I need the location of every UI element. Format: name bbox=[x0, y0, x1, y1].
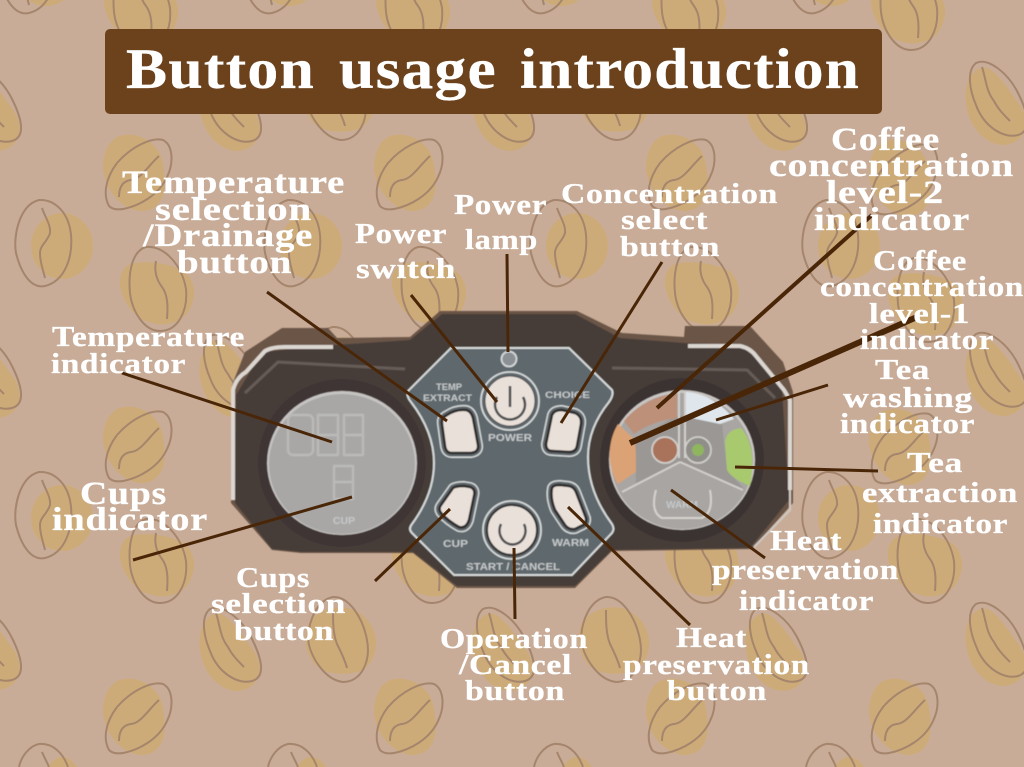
label: temperature selection button: Temperature bbox=[122, 165, 345, 201]
leader line: heat preservation button bbox=[568, 507, 690, 625]
leader line: level 1 bbox=[630, 317, 917, 443]
leader line: temperature selection bbox=[267, 292, 447, 421]
level 1 segment bbox=[610, 424, 636, 484]
seven segment digits bbox=[288, 415, 363, 499]
label: coffee concentration level 1 indicator bbox=[820, 246, 1024, 356]
label: cups indicator bbox=[52, 476, 208, 538]
label: tea extraction indicator: indicator bbox=[873, 509, 1008, 540]
device body outer edge bbox=[231, 311, 793, 588]
leader line: cups indicator bbox=[133, 497, 352, 560]
title banner: introduction bbox=[520, 38, 860, 101]
label: operation cancel button: button bbox=[465, 676, 565, 707]
label: temperature selection button: selection bbox=[155, 192, 312, 228]
label: power switch: Power bbox=[355, 219, 447, 250]
label: heat preservation button: button bbox=[667, 676, 767, 707]
label: concentration select button: Concentration bbox=[561, 179, 778, 210]
leader line: concentration select bbox=[561, 262, 662, 423]
panel button captions: CUP bbox=[443, 539, 468, 550]
title banner bbox=[105, 29, 882, 114]
label: heat preservation button: preservation bbox=[623, 650, 810, 681]
title banner: Button bbox=[126, 38, 315, 101]
leader line: heat preservation indicator bbox=[671, 490, 765, 558]
leader line: operation cancel bbox=[514, 548, 515, 619]
label: concentration select button: button bbox=[620, 232, 720, 263]
label: coffee concentration level 2 indicator bbox=[769, 122, 1014, 238]
panel button captions: CHOICE bbox=[545, 390, 590, 401]
dial dividers bbox=[622, 392, 743, 492]
label: heat preservation button: Heat bbox=[676, 623, 747, 654]
power lamp bbox=[502, 352, 516, 366]
label: concentration select button bbox=[561, 179, 778, 263]
label: power switch: switch bbox=[356, 254, 456, 285]
right indicator dial bbox=[600, 378, 764, 542]
panel button captions: EXTRACT bbox=[423, 393, 472, 404]
label: tea washing indicator: Tea bbox=[875, 355, 930, 386]
label: cups indicator: Cups bbox=[80, 476, 167, 512]
label: cups selection button: selection bbox=[211, 589, 346, 620]
leader line: tea extraction bbox=[735, 467, 878, 471]
panel button captions: TEMP bbox=[436, 382, 463, 393]
warm button bbox=[551, 485, 586, 529]
label: temperature selection button bbox=[122, 165, 345, 281]
label: coffee concentration level 2 indicator: level-2 bbox=[826, 175, 944, 211]
dial centre lamps bbox=[652, 437, 678, 463]
label: tea extraction indicator: extraction bbox=[862, 478, 1018, 509]
label: tea washing indicator: washing bbox=[843, 383, 973, 414]
label: coffee concentration level 1 indicator: Coffee bbox=[873, 246, 967, 277]
upper centre sector bbox=[635, 416, 745, 490]
leader line: cups selection bbox=[375, 509, 450, 581]
label: cups selection button: button bbox=[234, 616, 334, 647]
label: temperature indicator: indicator bbox=[51, 349, 186, 380]
label: concentration select button: select bbox=[621, 205, 708, 236]
power button bbox=[481, 372, 539, 430]
tea washing segment bbox=[686, 392, 734, 424]
right trim lower bbox=[754, 490, 790, 547]
label: operation cancel button bbox=[440, 624, 588, 707]
label: tea washing indicator bbox=[840, 355, 975, 440]
panel button captions: WARM bbox=[552, 538, 589, 549]
label: coffee concentration level 2 indicator: Coffee bbox=[831, 122, 940, 158]
label: heat preservation indicator bbox=[712, 526, 899, 617]
label: power lamp: Power bbox=[454, 190, 547, 221]
cup label: CUP bbox=[333, 515, 355, 527]
leader line: power switch bbox=[411, 295, 497, 402]
label: coffee concentration level 2 indicator: indicator bbox=[814, 202, 970, 238]
label: temperature indicator: Temperature bbox=[52, 322, 245, 353]
label: coffee concentration level 1 indicator: indicator bbox=[860, 325, 994, 356]
choice button bbox=[546, 410, 581, 452]
cup button bbox=[440, 486, 474, 527]
left display bbox=[258, 379, 426, 547]
leader line: power lamp bbox=[507, 254, 508, 352]
label: tea washing indicator: indicator bbox=[840, 409, 975, 440]
title banner: usage bbox=[339, 38, 497, 101]
label: temperature indicator bbox=[51, 322, 245, 380]
body trim bbox=[233, 346, 790, 500]
label: operation cancel button: Operation bbox=[440, 624, 588, 655]
label: heat preservation indicator: indicator bbox=[739, 586, 874, 617]
label: cups selection button: Cups bbox=[236, 563, 310, 594]
start cancel button bbox=[483, 501, 541, 559]
label: heat preservation button bbox=[623, 623, 810, 707]
label: coffee concentration level 2 indicator: concentration bbox=[769, 148, 1014, 184]
label: cups indicator: indicator bbox=[52, 502, 208, 538]
warm label: WARM bbox=[666, 500, 698, 511]
leader line: temperature indicator bbox=[122, 373, 332, 442]
inner band bbox=[245, 362, 775, 398]
label: coffee concentration level 1 indicator: level-1 bbox=[869, 299, 970, 330]
label: power lamp bbox=[454, 190, 547, 256]
label: tea extraction indicator: Tea bbox=[907, 448, 963, 479]
label: power lamp: lamp bbox=[465, 225, 538, 256]
panel button captions: START / CANCEL bbox=[466, 562, 560, 573]
label: tea extraction indicator bbox=[862, 448, 1018, 540]
label: heat preservation indicator: Heat bbox=[770, 526, 842, 557]
control panel device bbox=[231, 311, 793, 588]
label: cups selection button bbox=[211, 563, 346, 647]
panel button captions: POWER bbox=[488, 432, 532, 444]
label: operation cancel button: /Cancel bbox=[458, 650, 572, 681]
level 2 segment bbox=[624, 393, 677, 434]
warm label bbox=[654, 490, 711, 518]
label: coffee concentration level 1 indicator: concentration bbox=[820, 272, 1024, 303]
centre button panel bbox=[404, 344, 618, 579]
label: heat preservation indicator: preservation bbox=[712, 555, 899, 586]
leader line: tea washing bbox=[716, 385, 828, 420]
device body dark bbox=[235, 314, 789, 586]
tea extraction segment bbox=[725, 428, 752, 486]
label: temperature selection button: button bbox=[177, 245, 292, 281]
temp button bbox=[442, 410, 478, 453]
leader line: level 2 bbox=[657, 215, 872, 408]
label: power switch bbox=[355, 219, 456, 285]
label: temperature selection button: /Drainage bbox=[142, 218, 313, 254]
panel button captions bbox=[423, 382, 590, 573]
